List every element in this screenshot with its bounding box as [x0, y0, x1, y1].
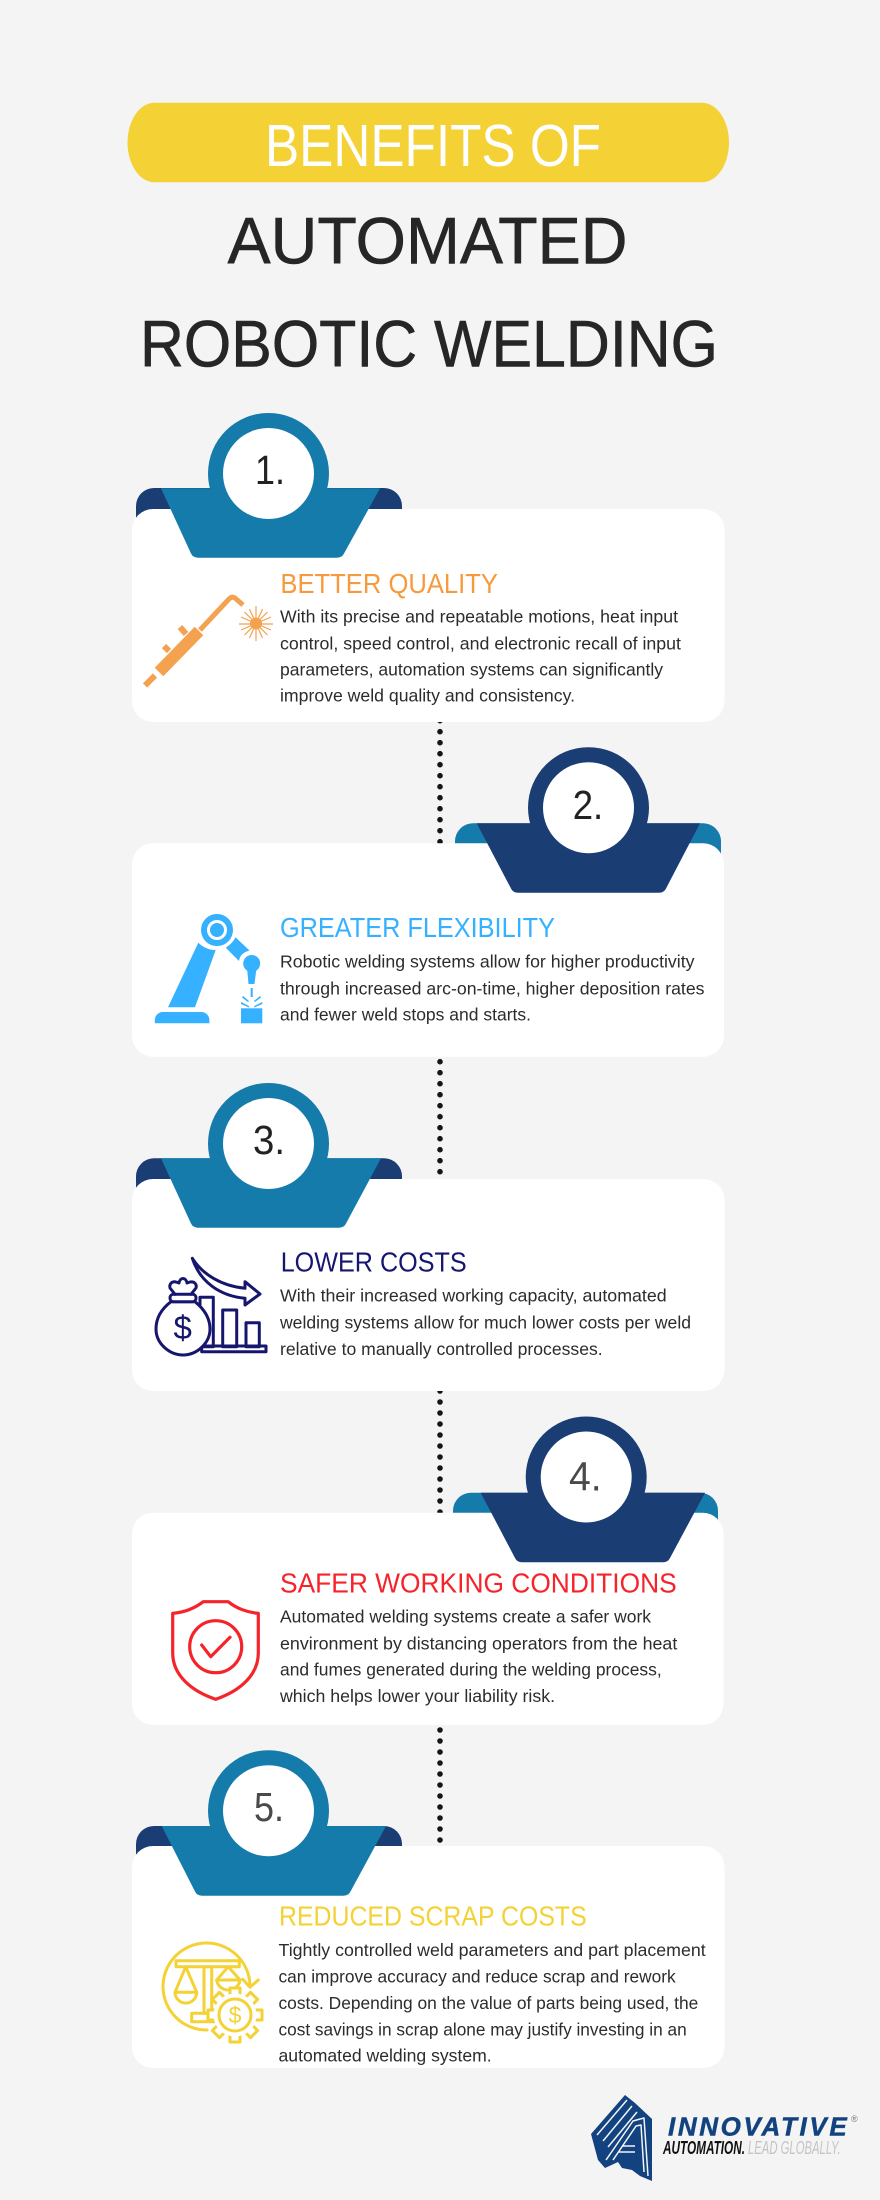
body text 3: With their increased working capacity, automated [280, 1286, 667, 1306]
body text 4: and fumes generated during the welding process, [280, 1660, 662, 1680]
icon: shield with check [173, 1602, 258, 1699]
body text 2: and fewer weld stops and starts. [280, 1005, 531, 1025]
body text 5: automated welding system. [278, 2046, 492, 2066]
badge tab 4 [453, 1493, 718, 1534]
body text 4: environment by distancing operators from the heat [280, 1633, 678, 1653]
wordmark: innovative: INNOVATIVE [668, 2112, 847, 2142]
heading: safer working conditions: SAFER WORKING CONDITIONS [280, 1568, 677, 1599]
icon: scales and gear: $ [229, 2002, 242, 2028]
body text 2: through increased arc-on-time, higher deposition rates [280, 978, 704, 998]
body text 4: which helps lower your liability risk. [279, 1686, 555, 1706]
number badge 5 [162, 1750, 386, 1896]
body text 4: Automated welding systems create a safer work [280, 1607, 651, 1627]
icon: welding torch [145, 597, 273, 686]
icon: scales and gear [163, 1943, 262, 2042]
number badge 5: 5. [254, 1784, 284, 1830]
icon: money bag with falling bars: $ [174, 1309, 192, 1346]
panel: lower costs [132, 1083, 724, 1391]
body text 2 [280, 951, 704, 1025]
card 3 [132, 1179, 724, 1391]
panel: greater flexibility [132, 747, 724, 1057]
card 4 [132, 1513, 724, 1725]
body text 5: can improve accuracy and reduce scrap and rework [278, 1967, 676, 1987]
body text 5: Tightly controlled weld parameters and part placement [278, 1940, 706, 1960]
badge tab 2 [455, 823, 721, 865]
body text 1: control, speed control, and electronic recall of input [280, 633, 681, 653]
body text 1: With its precise and repeatable motions, heat input [280, 607, 678, 627]
panel: safer working conditions [132, 1416, 724, 1725]
card 1 [132, 509, 724, 722]
card 5 [132, 1846, 724, 2068]
title pill: benefits of [128, 103, 729, 182]
body text 5: cost savings in scrap alone may justify investing in an [278, 2019, 687, 2039]
number badge 3: 3. [253, 1117, 285, 1163]
panel: reduced scrap costs [132, 1750, 724, 2068]
body text 1 [280, 607, 681, 706]
panel: better quality [132, 413, 724, 722]
body text 4 [279, 1607, 678, 1706]
body text 2: Robotic welding systems allow for higher productivity [280, 951, 695, 971]
logo: innovative automation [591, 2095, 858, 2181]
heading: better quality: BETTER QUALITY [280, 568, 498, 599]
icon: money bag with falling bars [156, 1258, 266, 1355]
body text 1: parameters, automation systems can significantly [280, 660, 663, 680]
registered mark: ® [851, 2114, 858, 2124]
number badge 1: 1. [255, 447, 285, 493]
title line: robotic welding: ROBOTIC WELDING [140, 307, 718, 381]
dotted connectors between cards [437, 721, 443, 1847]
number badge 1 [161, 413, 380, 558]
body text 3 [279, 1286, 691, 1359]
body text 3: welding systems allow for much lower costs per weld [279, 1312, 691, 1332]
number badge 3 [161, 1083, 381, 1228]
title block [128, 103, 729, 381]
number badge 2: 2. [573, 782, 603, 828]
title pill: benefits of: BENEFITS OF [265, 113, 601, 179]
body text 1: improve weld quality and consistency. [280, 686, 575, 706]
number badge 4 [481, 1416, 705, 1562]
heading: lower costs: LOWER COSTS [281, 1247, 467, 1278]
badge tab 3 [136, 1158, 402, 1200]
number badge 2 [477, 747, 700, 893]
body text 5 [278, 1940, 706, 2066]
icon: logo emblem [591, 2095, 652, 2181]
heading: reduced scrap costs: REDUCED SCRAP COSTS [279, 1901, 587, 1932]
badge tab 1 [136, 488, 402, 530]
card 2 [132, 843, 724, 1057]
tagline: automation: AUTOMATION. [662, 2138, 745, 2158]
body text 3: relative to manually controlled processes. [280, 1339, 603, 1359]
badge tab 5 [136, 1826, 402, 1867]
title line: automated: AUTOMATED [228, 203, 628, 277]
body text 5: costs. Depending on the value of parts being used, the [278, 1993, 698, 2013]
heading: greater flexibility: GREATER FLEXIBILITY [280, 912, 555, 943]
number badge 4: 4. [569, 1454, 602, 1500]
icon: robot arm [155, 917, 262, 1023]
